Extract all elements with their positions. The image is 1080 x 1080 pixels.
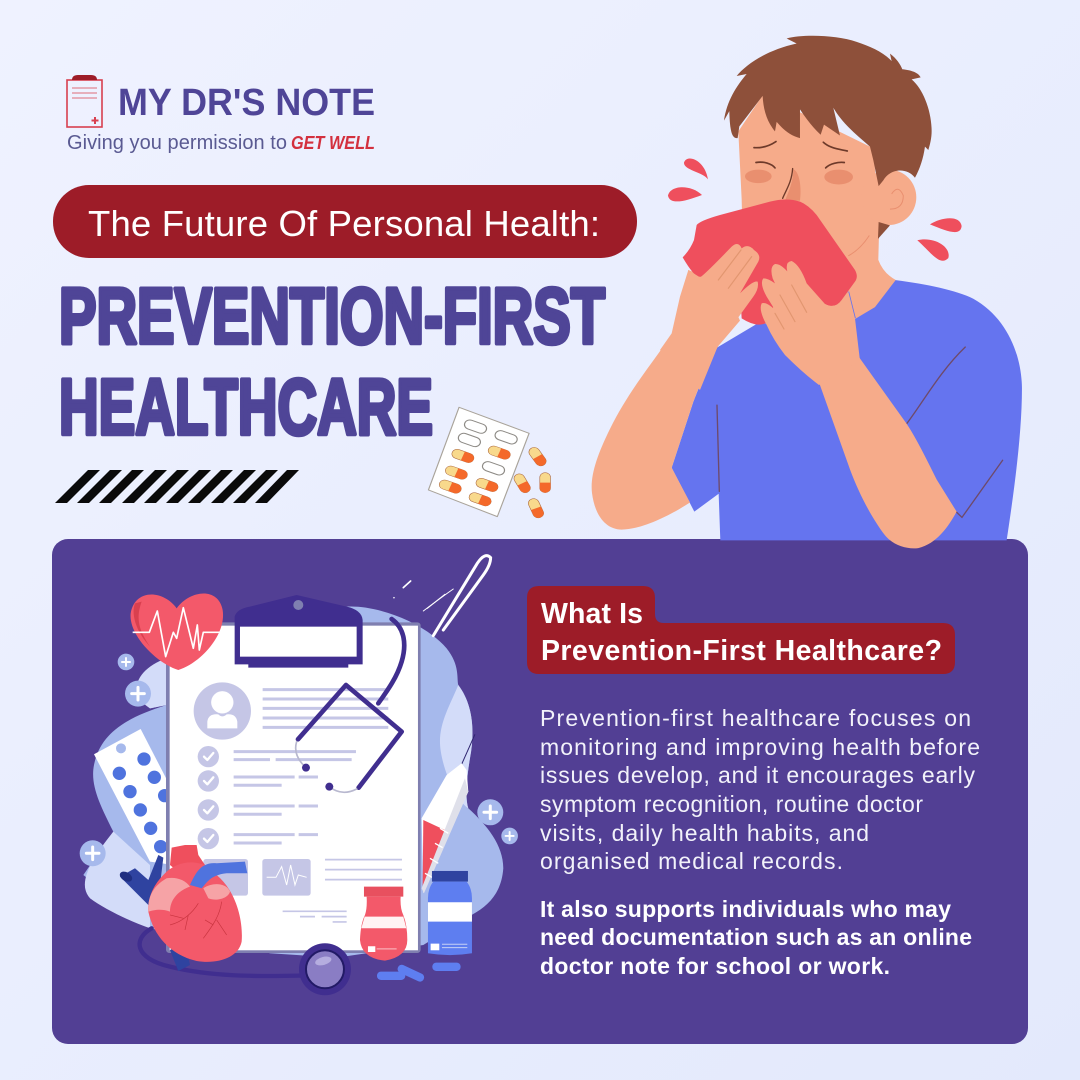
subtitle pill (53, 185, 637, 258)
main title: HEALTHCARE (59, 362, 433, 451)
heading tag (527, 586, 955, 674)
blister pack (94, 729, 183, 865)
clipboard (166, 595, 421, 953)
bold body text: need documentation such as an online (540, 924, 972, 950)
body text: visits, daily health habits, and (540, 820, 869, 846)
face features (754, 142, 847, 168)
body text: monitoring and improving health before (540, 734, 980, 760)
syringe (422, 734, 475, 893)
body text: organised medical records. (540, 848, 843, 874)
large anatomical heart (118, 845, 247, 971)
icon: pill blister pack with capsules (428, 407, 551, 519)
droplets (668, 158, 962, 261)
subtitle pill: The Future Of Personal Health: (88, 203, 600, 244)
profile avatar (194, 682, 251, 740)
thermometer outline (393, 556, 491, 636)
stethoscope (140, 619, 404, 976)
finger lines (718, 250, 807, 329)
heading tag: Prevention-First Healthcare? (541, 635, 942, 667)
ECG boxes (203, 859, 311, 896)
checklist ticks (198, 746, 219, 849)
neck and head (738, 94, 916, 327)
blue pills (377, 963, 461, 983)
tagline: Giving you permission to (67, 132, 287, 154)
right arm (819, 334, 957, 548)
logo (67, 75, 375, 154)
heart with pulse (131, 594, 223, 670)
illustration: medical clipboard scene (80, 556, 518, 995)
left hand (660, 244, 759, 390)
left arm (592, 270, 740, 530)
main title (59, 271, 605, 451)
background blobs (83, 607, 503, 958)
body text (540, 705, 980, 874)
shirt (672, 280, 1022, 540)
body text: issues develop, and it encourages early (540, 762, 976, 788)
towel (683, 199, 857, 325)
bold body text: doctor note for school or work. (540, 953, 890, 979)
illustration: sick man blowing nose (592, 36, 1022, 548)
form lines (234, 690, 388, 843)
blue medicine bottle (428, 871, 472, 955)
body text: symptom recognition, routine doctor (540, 791, 923, 817)
bold body text (540, 896, 972, 979)
panel: what is prevention-first healthcare (52, 539, 1028, 1044)
body text: Prevention-first healthcare focuses on (540, 705, 971, 731)
clip (235, 595, 363, 668)
cheeks and nose (745, 169, 853, 201)
decorative slanted stripes (55, 470, 299, 503)
red medicine jar (360, 887, 407, 961)
neckline strip (848, 292, 855, 318)
plus icons (80, 654, 518, 866)
stethoscope chest piece (299, 943, 351, 995)
brand name: MY DR'S NOTE (118, 82, 375, 124)
icon: clipboard logo (67, 75, 102, 127)
tagline emphasis: GET WELL (291, 133, 375, 153)
shirt creases (717, 347, 1003, 517)
right hand (761, 261, 860, 385)
hair (724, 36, 932, 186)
main title: PREVENTION-FIRST (59, 271, 605, 360)
bold body text: It also supports individuals who may (540, 896, 951, 922)
heading tag: What Is (541, 598, 643, 630)
